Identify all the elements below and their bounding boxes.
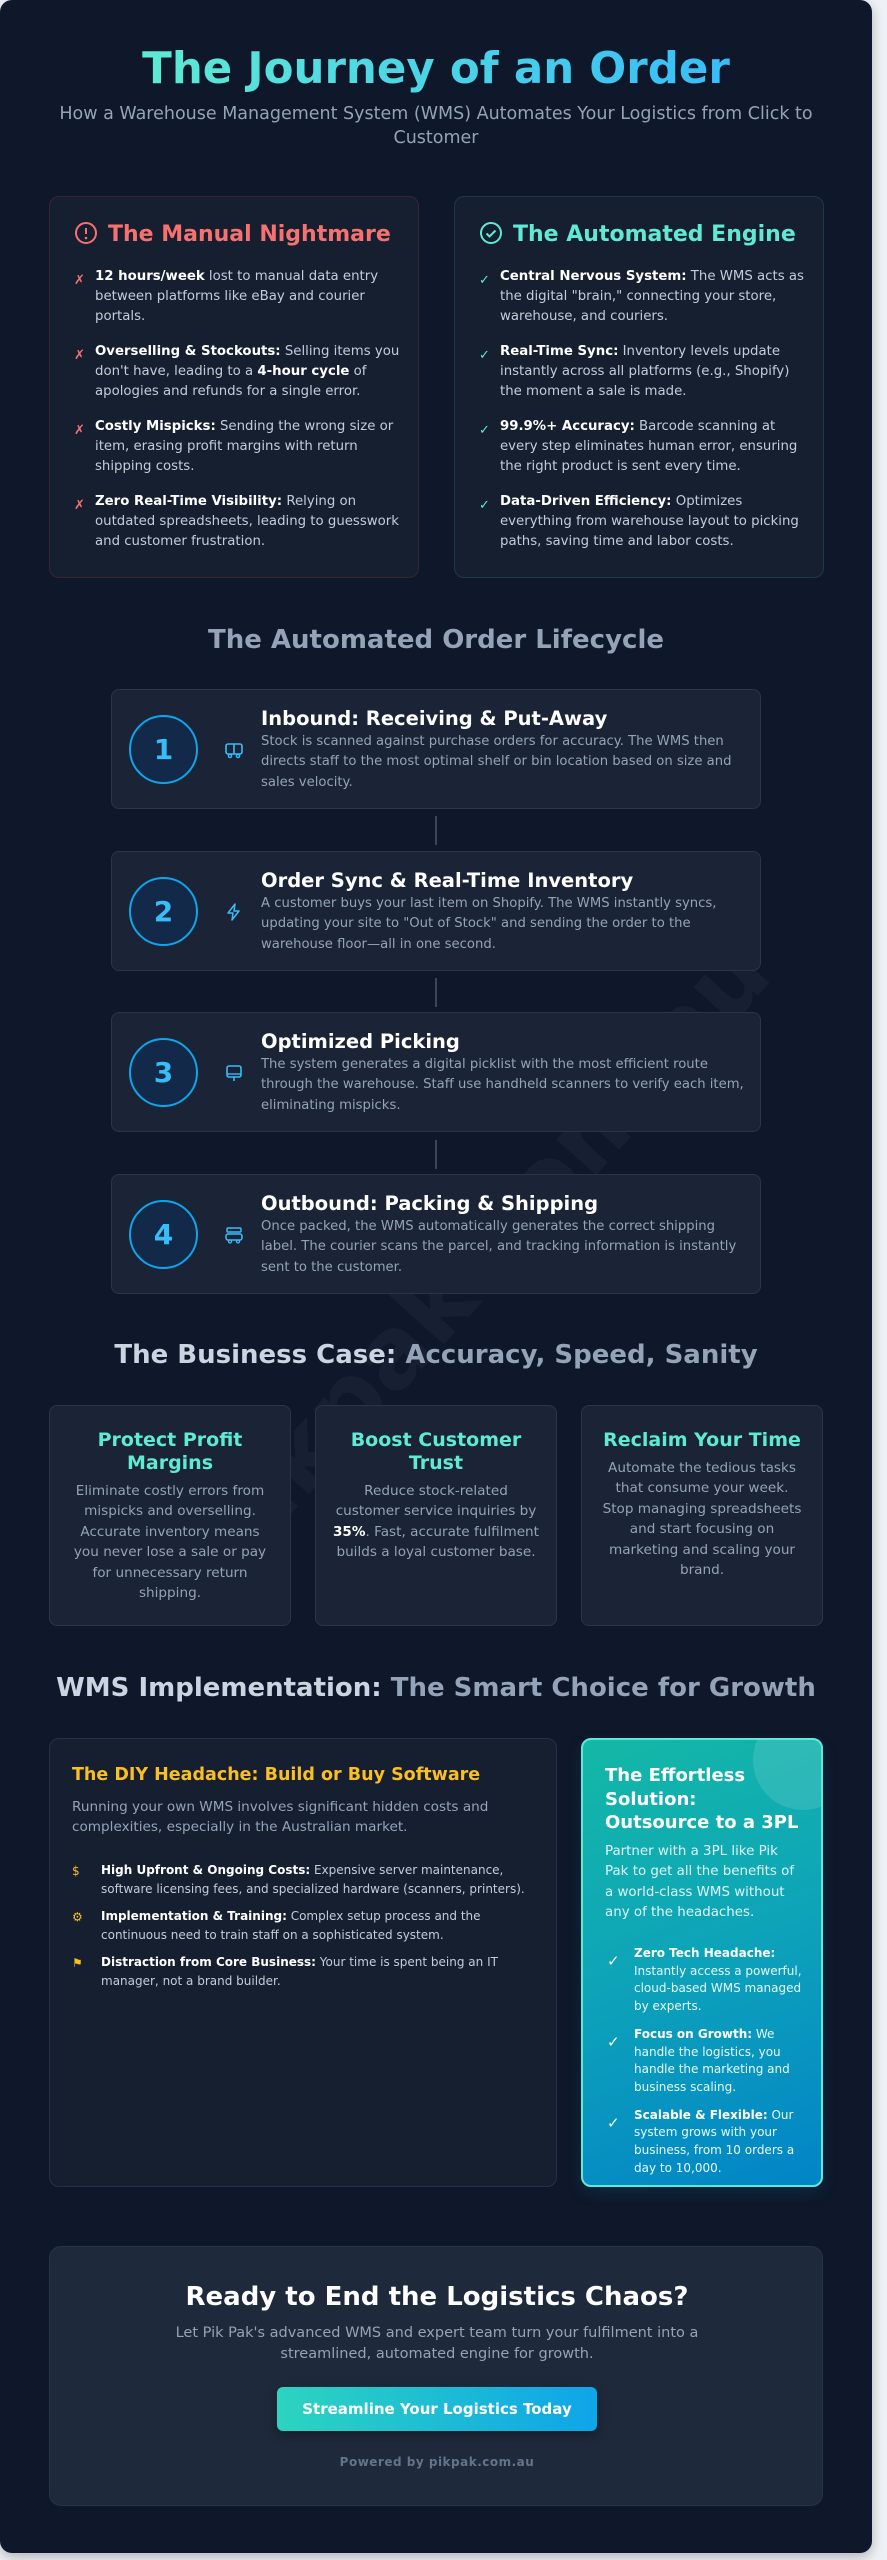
title: The Journey of an Order <box>142 44 730 94</box>
list: benefits <box>479 269 804 549</box>
list: 3PL benefits: ✓ <box>607 2033 620 2051</box>
step 1 <box>111 689 761 809</box>
list: pain points: Overselling & Stockouts: Selling items you don't have, leading to a 4-hour cycle of apologies and refunds for a single error. <box>95 344 399 399</box>
heading: CTA: Ready to End the Logistics Chaos? <box>186 2282 688 2312</box>
text: 3PL intro: Partner with a 3PL like Pik Pak to get all the benefits of a world-class WMS without any of the headaches. <box>605 1844 794 1920</box>
list: DIY costs: Implementation & Training: Complex setup process and the continuous need to train staff on a sophisticated system. <box>101 1909 481 1942</box>
card: boost trust: customer service inquiries by 35%. Fast, accurate fulfilment builds a loyal customer base. <box>333 1503 539 1560</box>
heading: manual nightmare: The Manual Nightmare <box>108 222 391 247</box>
card: protect profit <box>49 1405 291 1626</box>
list: pain points: ✗ <box>74 348 85 363</box>
list: pain points: Zero Real-Time Visibility: Relying on outdated spreadsheets, leading to guesswork and customer frustration. <box>95 494 399 549</box>
list: benefits: Data-Driven Efficiency: Optimizes everything from warehouse layout to picking paths, saving time and labor costs. <box>500 494 799 549</box>
card: protect profit: Eliminate costly errors from mispicks and overselling. Accurate inventory means you never lose a sale or pay for unnecessary return shipping. <box>74 1483 266 1601</box>
step 2: 2 <box>154 895 173 928</box>
step 4: Once packed, the WMS automatically generates the correct shipping label. The courier scans the parcel, and tracking information is instantly sent to the customer. <box>261 1219 736 1275</box>
heading: 3PL: Outsource to a 3PL <box>605 1812 798 1833</box>
list: benefits: 99.9%+ Accuracy: Barcode scanning at every step eliminates human error, ensuring the right product is sent every time. <box>500 419 797 474</box>
card: boost trust: Reduce stock-related <box>364 1483 508 1499</box>
list: pain points: ✗ <box>74 273 85 288</box>
text: DIY intro: Running your own WMS involves significant hidden costs and complexities, especially in the Australian market. <box>72 1799 488 1835</box>
panel: 3PL solution <box>581 1738 823 2187</box>
list: benefits: ✓ <box>479 273 490 288</box>
panel: DIY headache <box>49 1738 557 2187</box>
step 1: 1 <box>154 733 173 766</box>
step 2 <box>111 851 761 971</box>
decorative circle <box>753 1710 853 1810</box>
list: DIY costs: ⚙ <box>72 1910 83 1924</box>
list: benefits: ✓ <box>479 498 490 513</box>
footer credit: Powered by pikpak.com.au <box>340 2455 534 2469</box>
heading: DIY: The DIY Headache: Build or Buy Software <box>72 1765 480 1785</box>
panel: manual nightmare <box>49 196 419 578</box>
list: benefits: ✓ <box>479 348 490 363</box>
list: benefits: ✓ <box>479 423 490 438</box>
text: CTA: Let Pik Pak's advanced WMS and expert team turn your fulfilment into a streamlined, automated engine for growth. <box>176 2325 698 2362</box>
list: pain points <box>74 269 399 549</box>
list: 3PL benefits: Scalable & Flexible: Our system grows with your business, from 10 orders a day to 10,000. <box>634 2108 794 2175</box>
card: boost trust: Boost Customer Trust <box>351 1429 521 1474</box>
step 3: The system generates a digital picklist with the most efficient route through the warehouse. Staff use handheld scanners to verify each item, eliminating mispicks. <box>261 1057 744 1113</box>
card: protect profit: Protect Profit Margins <box>98 1429 242 1474</box>
heading: wms implementation: WMS Implementation: The Smart Choice for Growth <box>56 1673 816 1703</box>
button: Streamline Your Logistics Today <box>302 2400 572 2418</box>
panel: automated engine <box>454 196 824 578</box>
list: benefits: Real-Time Sync: Inventory levels update instantly across all platforms (e.g., Shopify) the moment a sale is made. <box>500 344 789 399</box>
icon: truck <box>225 743 243 758</box>
list: pain points: Costly Mispicks: Sending the wrong size or item, erasing profit margins with return shipping costs. <box>95 419 393 474</box>
step 1: Inbound: Receiving & Put-Away <box>261 707 607 730</box>
panel: CTA <box>49 2246 823 2506</box>
card: reclaim time <box>581 1405 823 1626</box>
list: pain points: ✗ <box>74 423 85 438</box>
button <box>277 2387 597 2431</box>
list: pain points: 12 hours/week lost to manual data entry between platforms like eBay and courier portals. <box>95 269 378 324</box>
heading: 3PL: The Effortless <box>605 1765 745 1786</box>
step 4: 4 <box>154 1218 173 1251</box>
list: 3PL benefits: Focus on Growth: We handle the logistics, you handle the marketing and business scaling. <box>634 2027 790 2094</box>
icon: lightning <box>227 903 240 921</box>
step 1: Stock is scanned against purchase orders for accuracy. The WMS then directs staff to the most optimal shelf or bin location based on size and sales velocity. <box>261 734 731 790</box>
card: reclaim time: Reclaim Your Time <box>603 1429 801 1451</box>
list: DIY costs: Distraction from Core Business: Your time is spent being an IT manager, not a brand builder. <box>101 1955 498 1988</box>
list: DIY costs: High Upfront & Ongoing Costs: Expensive server maintenance, software licensing fees, and specialized hardware (scanners, printers). <box>101 1863 525 1896</box>
list: DIY costs: $ <box>72 1864 80 1878</box>
icon: scanner screen <box>226 1065 242 1081</box>
list: 3PL benefits: ✓ <box>607 2114 620 2132</box>
list: 3PL benefits: ✓ <box>607 1952 620 1970</box>
list: DIY costs <box>72 1863 525 1988</box>
list: 3PL benefits <box>607 1946 802 2175</box>
heading: 3PL <box>605 1765 798 1833</box>
step 3: Optimized Picking <box>261 1030 460 1053</box>
list: 3PL benefits: Zero Tech Headache: Instantly access a powerful, cloud-based WMS managed by experts. <box>634 1946 802 2013</box>
subtitle: How a Warehouse Management System (WMS) Automates Your Logistics from Click to Customer <box>59 104 813 148</box>
watermark: pikpak.com.au <box>167 917 793 1593</box>
step 4: Outbound: Packing & Shipping <box>261 1192 598 1215</box>
heading: automated engine: The Automated Engine <box>513 222 796 247</box>
step 2: Order Sync & Real-Time Inventory <box>261 869 633 892</box>
step 3 <box>111 1012 761 1132</box>
step 2: A customer buys your last item on Shopify. The WMS instantly syncs, updating your site to "Out of Stock" and sending the order to the warehouse floor—all in one second. <box>261 896 716 952</box>
heading: lifecycle: The Automated Order Lifecycle <box>208 625 664 655</box>
list: pain points: ✗ <box>74 498 85 513</box>
step 4 <box>111 1174 761 1294</box>
list: benefits: Central Nervous System: The WMS acts as the digital "brain," connecting your store, warehouse, and couriers. <box>500 269 804 324</box>
card: boost trust <box>315 1405 557 1626</box>
heading: 3PL: Solution: <box>605 1788 696 1810</box>
card: reclaim time: Automate the tedious tasks that consume your week. Stop managing spreadsheets and start focusing on marketing and scaling your brand. <box>603 1460 801 1578</box>
step 3: 3 <box>154 1056 173 1089</box>
heading: business case: The Business Case: Accuracy, Speed, Sanity <box>114 1340 758 1370</box>
list: DIY costs: ⚑ <box>72 1956 83 1970</box>
icon: van <box>225 1227 243 1244</box>
